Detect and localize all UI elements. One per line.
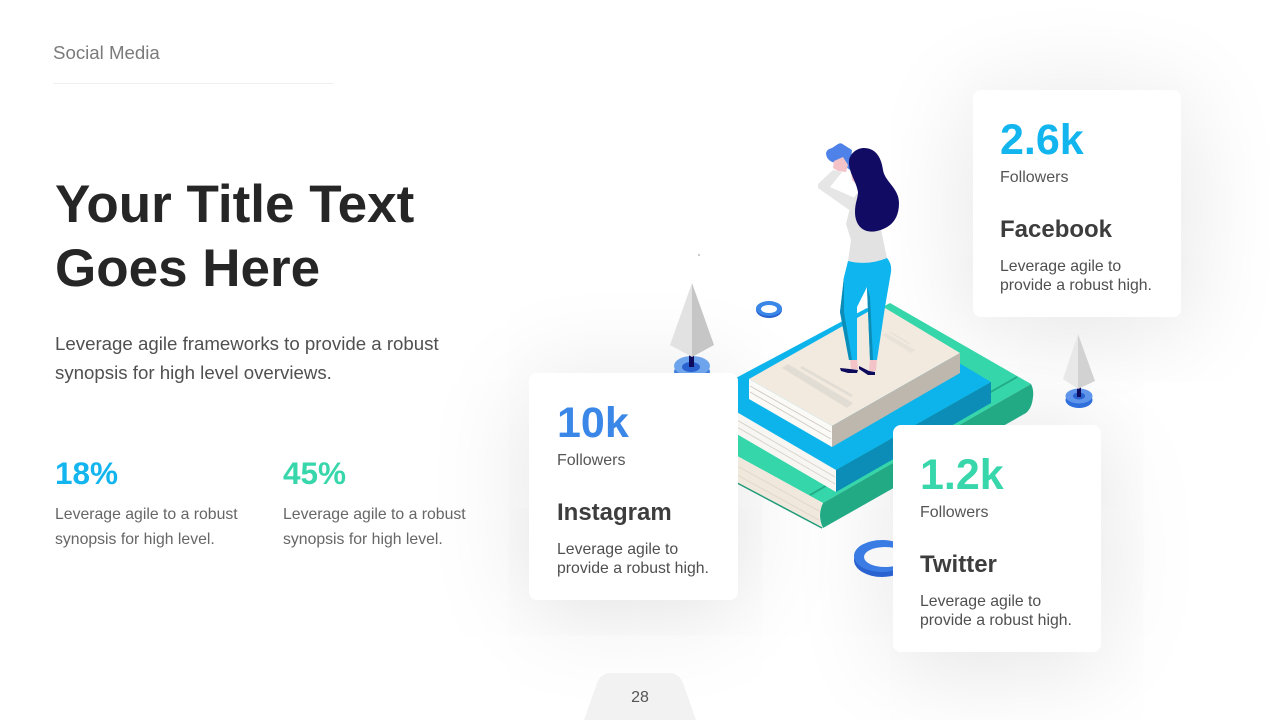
stat: 18%: 18% xyxy=(55,455,118,491)
title: Goes Here xyxy=(55,239,320,298)
arm xyxy=(818,170,855,212)
stat: 18% xyxy=(55,455,238,548)
card: Instagram: Instagram xyxy=(557,498,672,526)
page number tab: 28 xyxy=(631,689,649,706)
card: Twitter xyxy=(893,425,1101,652)
stat: 18%: Leverage agile to a robust xyxy=(55,506,238,523)
shoes xyxy=(840,368,858,373)
intro text: Leverage agile frameworks to provide a robust xyxy=(55,333,439,354)
card: Facebook: provide a robust high. xyxy=(1000,277,1152,294)
stat: 18%: synopsis for high level. xyxy=(55,531,215,548)
stat: 45% xyxy=(283,455,466,548)
card: Instagram: 10k xyxy=(557,399,629,447)
ankles xyxy=(850,358,877,371)
stat: 45%: synopsis for high level. xyxy=(283,531,443,548)
card: Facebook: Followers xyxy=(1000,169,1068,186)
card: Facebook: Facebook xyxy=(1000,216,1112,242)
stat: 45%: Leverage agile to a robust xyxy=(283,506,466,523)
card: Instagram: Followers xyxy=(557,452,625,469)
card: Twitter: provide a robust high. xyxy=(920,612,1072,629)
card: Instagram: provide a robust high. xyxy=(557,560,709,577)
card: Instagram: Leverage agile to xyxy=(557,541,678,558)
card: Twitter: Leverage agile to xyxy=(920,593,1041,610)
card: Facebook: Leverage agile to xyxy=(1000,258,1121,275)
trousers xyxy=(840,258,891,360)
bottom green book xyxy=(690,303,1033,528)
neck xyxy=(850,165,858,186)
middle blue book xyxy=(706,308,991,492)
woman xyxy=(818,143,899,375)
intro text: synopsis for high level overviews. xyxy=(55,362,332,383)
title: Your Title Text xyxy=(55,175,414,234)
torso xyxy=(846,190,887,263)
card: Twitter: Followers xyxy=(920,504,988,521)
card: Instagram xyxy=(529,373,738,600)
icon: large ring xyxy=(854,540,910,577)
stat: 45%: 45% xyxy=(283,455,346,491)
top cream book xyxy=(749,305,960,447)
card: Facebook: 2.6k xyxy=(1000,116,1084,164)
hair xyxy=(849,148,899,232)
card: Twitter: Twitter xyxy=(920,550,997,578)
intro text xyxy=(55,333,439,383)
icon: right tree xyxy=(1063,334,1095,408)
page number tab xyxy=(584,673,696,720)
icon: small ring xyxy=(756,301,782,318)
binoculars xyxy=(826,143,852,170)
title xyxy=(55,175,414,298)
section label: Social Media xyxy=(53,42,160,63)
icon: left tree xyxy=(670,283,714,382)
card: Facebook xyxy=(973,90,1181,317)
card: Twitter: 1.2k xyxy=(920,451,1004,499)
hand xyxy=(833,157,848,172)
